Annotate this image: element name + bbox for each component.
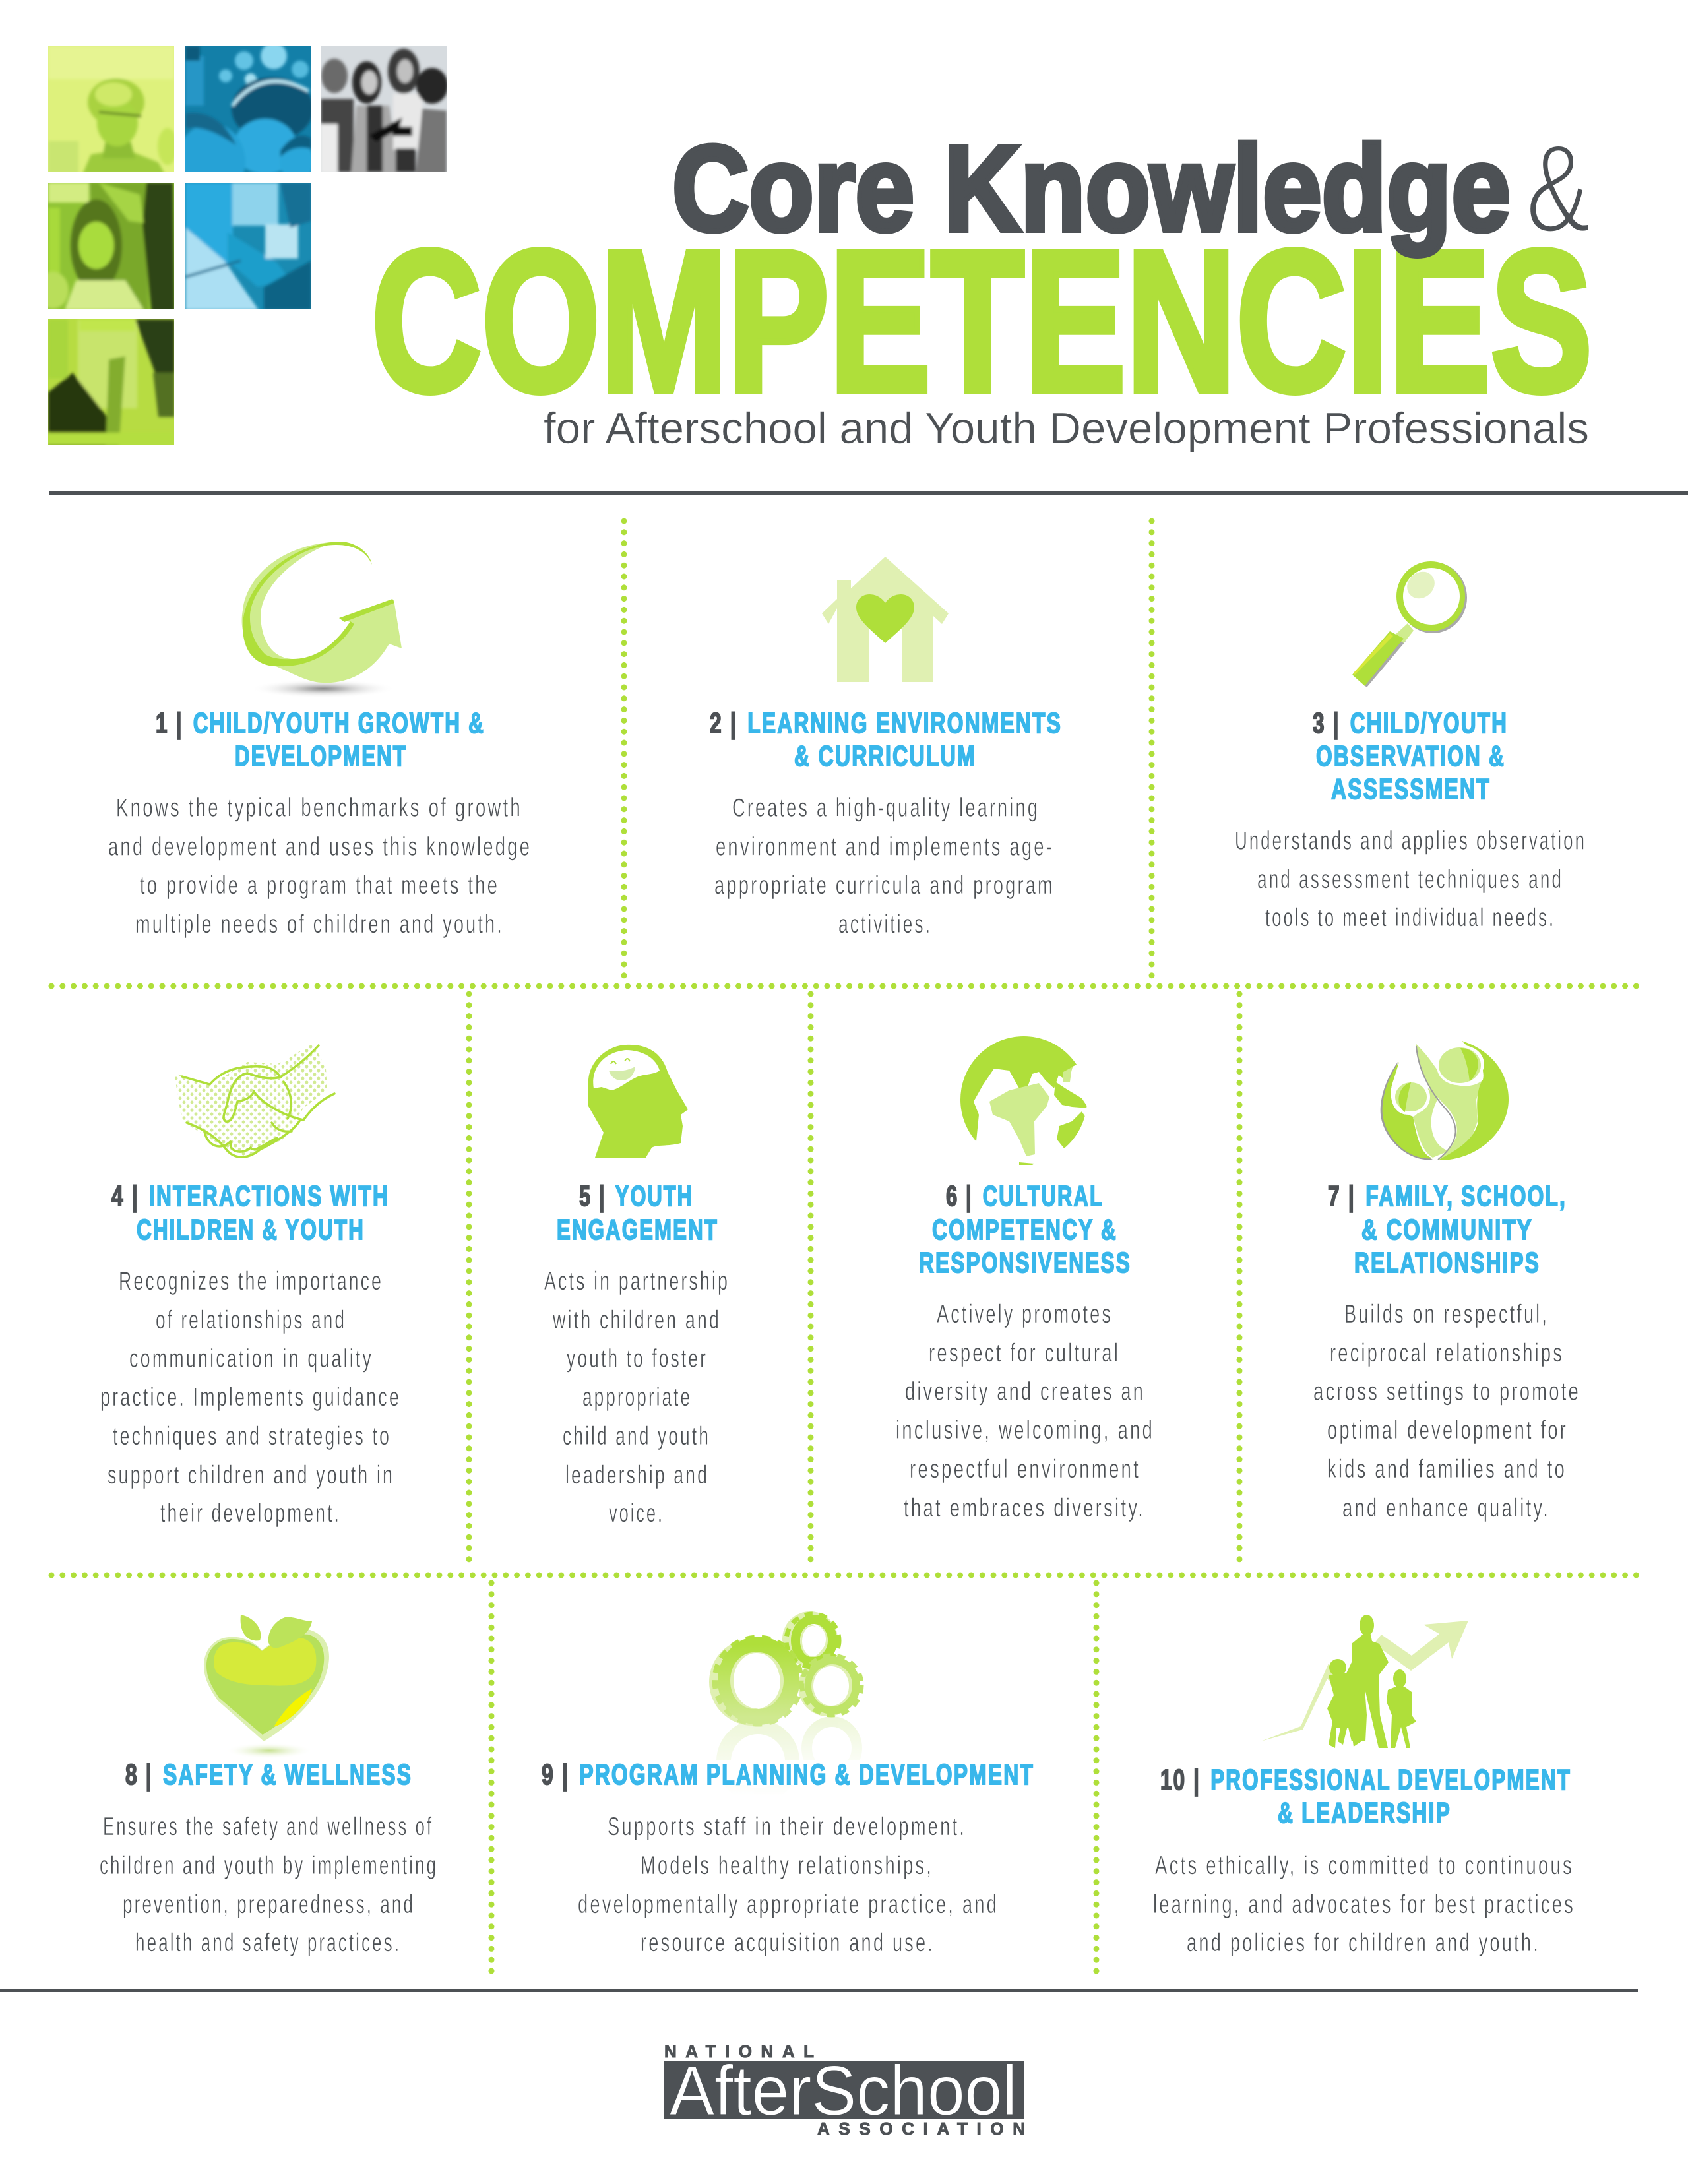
heading 8: 8 | SAFETY & WELLNESS bbox=[125, 1759, 412, 1792]
body text 5: leadership and bbox=[565, 1461, 709, 1489]
body text 4: of relationships and bbox=[156, 1306, 346, 1334]
icon: apple heart bbox=[204, 1615, 329, 1759]
body text 4: support children and youth in bbox=[108, 1461, 394, 1489]
icon: swirl arrow bbox=[242, 542, 402, 698]
body text 7 bbox=[1313, 1300, 1580, 1522]
heading 5: 5 | YOUTH bbox=[579, 1180, 693, 1213]
body text 10 bbox=[1153, 1852, 1575, 1957]
heading 6: COMPETENCY & bbox=[932, 1214, 1117, 1246]
heading 2 bbox=[710, 707, 1062, 772]
body text 5: voice. bbox=[609, 1499, 664, 1528]
panel 10: professional development bbox=[1153, 1615, 1575, 1957]
panel 8: safety and wellness bbox=[100, 1615, 438, 1957]
body text 5: with children and bbox=[552, 1306, 721, 1334]
body text 4: their development. bbox=[160, 1499, 341, 1528]
body text 8: health and safety practices. bbox=[135, 1929, 401, 1957]
body text 7: and enhance quality. bbox=[1342, 1494, 1550, 1522]
photo: hands over craft, blue tint bbox=[185, 183, 311, 310]
heading 6 bbox=[919, 1180, 1131, 1279]
heading 3: OBSERVATION & bbox=[1316, 740, 1505, 772]
body text 6: that embraces diversity. bbox=[904, 1494, 1145, 1522]
body text 6 bbox=[896, 1300, 1154, 1522]
header photo grid bbox=[37, 43, 448, 449]
heading 2: 2 | LEARNING ENVIRONMENTS bbox=[710, 707, 1062, 740]
body text 8: prevention, preparedness, and bbox=[123, 1890, 415, 1919]
heading 10: & LEADERSHIP bbox=[1278, 1797, 1451, 1829]
body text 1 bbox=[108, 794, 532, 939]
icon: globe bbox=[960, 1036, 1087, 1165]
heading 7: RELATIONSHIPS bbox=[1354, 1247, 1540, 1279]
heading 5 bbox=[557, 1180, 718, 1246]
body text 9: Supports staff in their development. bbox=[608, 1813, 966, 1841]
heading 3 bbox=[1313, 707, 1508, 805]
body text 6: inclusive, welcoming, and bbox=[896, 1416, 1154, 1445]
heading 2: & CURRICULUM bbox=[794, 740, 976, 772]
body text 7: across settings to promote bbox=[1313, 1377, 1580, 1406]
body text 5: child and youth bbox=[563, 1422, 710, 1451]
heading 1: 1 | CHILD/YOUTH GROWTH & bbox=[156, 707, 485, 740]
body text 1: to provide a program that meets the bbox=[140, 871, 499, 900]
body text 9 bbox=[578, 1813, 999, 1957]
panel 7: family, school, community bbox=[1313, 1041, 1580, 1522]
body text 1: Knows the typical benchmarks of growth bbox=[116, 794, 522, 823]
icon: magnifying glass bbox=[1352, 561, 1467, 687]
body text 5: youth to foster bbox=[567, 1344, 708, 1373]
body text 4: communication in quality bbox=[129, 1344, 373, 1373]
body text 8 bbox=[100, 1813, 438, 1957]
title: Core Knowledge: Core Knowledge bbox=[672, 120, 1511, 256]
heading 9: 9 | PROGRAM PLANNING & DEVELOPMENT bbox=[542, 1759, 1034, 1792]
heading 5: ENGAGEMENT bbox=[557, 1214, 718, 1246]
body text 7: reciprocal relationships bbox=[1330, 1339, 1564, 1367]
panel 3: observation and assessment bbox=[1235, 561, 1586, 932]
body text 5: appropriate bbox=[582, 1383, 692, 1412]
photo: smiling woman with glasses bbox=[48, 46, 177, 174]
body text 4: techniques and strategies to bbox=[113, 1422, 391, 1451]
body text 2: environment and implements age- bbox=[716, 832, 1054, 861]
body text 7: optimal development for bbox=[1327, 1416, 1568, 1445]
icon: house with heart bbox=[822, 557, 949, 682]
heading 7: & COMMUNITY bbox=[1361, 1214, 1533, 1246]
icon: head with smiling brain bbox=[588, 1045, 688, 1158]
logo: National AfterSchool Association: AfterSchool bbox=[670, 2051, 1017, 2130]
body text 4 bbox=[100, 1267, 401, 1528]
body text 10: and policies for children and youth. bbox=[1187, 1929, 1540, 1957]
body text 4: practice. Implements guidance bbox=[100, 1383, 401, 1412]
icon: gears bbox=[693, 1614, 891, 1795]
heading 1: DEVELOPMENT bbox=[235, 740, 407, 772]
heading 6: RESPONSIVENESS bbox=[919, 1247, 1131, 1279]
photo: child at table, green tint bbox=[48, 319, 175, 449]
body text 1: and development and uses this knowledge bbox=[108, 832, 532, 861]
panel 9: program planning bbox=[542, 1614, 1034, 1957]
body text 8: children and youth by implementing bbox=[100, 1852, 438, 1880]
icon: family swirl figure bbox=[1381, 1041, 1509, 1160]
body text 7: kids and families and to bbox=[1327, 1455, 1567, 1483]
body text 4: Recognizes the importance bbox=[119, 1267, 383, 1295]
heading 3: ASSESSMENT bbox=[1331, 773, 1491, 805]
heading 4: CHILDREN & YOUTH bbox=[137, 1214, 365, 1246]
body text 6: diversity and creates an bbox=[905, 1377, 1145, 1406]
body text 9: resource acquisition and use. bbox=[641, 1929, 935, 1957]
body text 9: developmentally appropriate practice, and bbox=[578, 1890, 999, 1919]
icon: handshake bbox=[174, 1044, 334, 1158]
body text 2 bbox=[714, 794, 1055, 939]
body text 2: Creates a high-quality learning bbox=[732, 794, 1040, 823]
heading 6: 6 | CULTURAL bbox=[946, 1180, 1104, 1213]
photo: group with tablet, grayscale bbox=[321, 46, 448, 174]
heading 10 bbox=[1160, 1764, 1571, 1829]
body text 2: appropriate curricula and program bbox=[714, 871, 1055, 900]
body text 9: Models healthy relationships, bbox=[641, 1852, 933, 1880]
photo: girl looking at camera, green tint bbox=[48, 183, 174, 309]
heading 1 bbox=[156, 707, 485, 772]
body text 6: Actively promotes bbox=[937, 1300, 1113, 1328]
heading 4: 4 | INTERACTIONS WITH bbox=[111, 1180, 389, 1213]
icon: family silhouettes with growth arrow bbox=[1261, 1615, 1468, 1748]
heading 3: 3 | CHILD/YOUTH bbox=[1313, 707, 1508, 740]
heading 7: 7 | FAMILY, SCHOOL, bbox=[1328, 1180, 1567, 1213]
panel 6: cultural competency bbox=[896, 1029, 1154, 1522]
logo: National AfterSchool Association: NATIONAL bbox=[664, 2042, 814, 2061]
logo: National AfterSchool Association: ASSOCIATION bbox=[817, 2119, 1025, 2138]
body text 2: activities. bbox=[838, 910, 932, 939]
body text 3 bbox=[1235, 827, 1586, 932]
subtitle: for Afterschool and Youth Development Professionals bbox=[544, 404, 1589, 453]
panel 5: youth engagement bbox=[544, 1045, 730, 1528]
heading 4 bbox=[111, 1180, 389, 1246]
body text 5 bbox=[544, 1267, 730, 1528]
title: ampersand: & bbox=[1526, 119, 1591, 259]
panel 1: child/youth growth bbox=[108, 542, 532, 939]
body text 1: multiple needs of children and youth. bbox=[135, 910, 504, 939]
body text 6: respectful environment bbox=[910, 1455, 1141, 1483]
body text 7: Builds on respectful, bbox=[1344, 1300, 1549, 1328]
body text 6: respect for cultural bbox=[929, 1339, 1120, 1367]
panel 2: learning environments bbox=[710, 557, 1062, 939]
panel 4: interactions bbox=[100, 1044, 401, 1528]
body text 5: Acts in partnership bbox=[544, 1267, 730, 1295]
body text 8: Ensures the safety and wellness of bbox=[103, 1813, 433, 1841]
heading 7 bbox=[1328, 1180, 1567, 1279]
photo: teens leaning in, blue tint bbox=[185, 46, 311, 172]
